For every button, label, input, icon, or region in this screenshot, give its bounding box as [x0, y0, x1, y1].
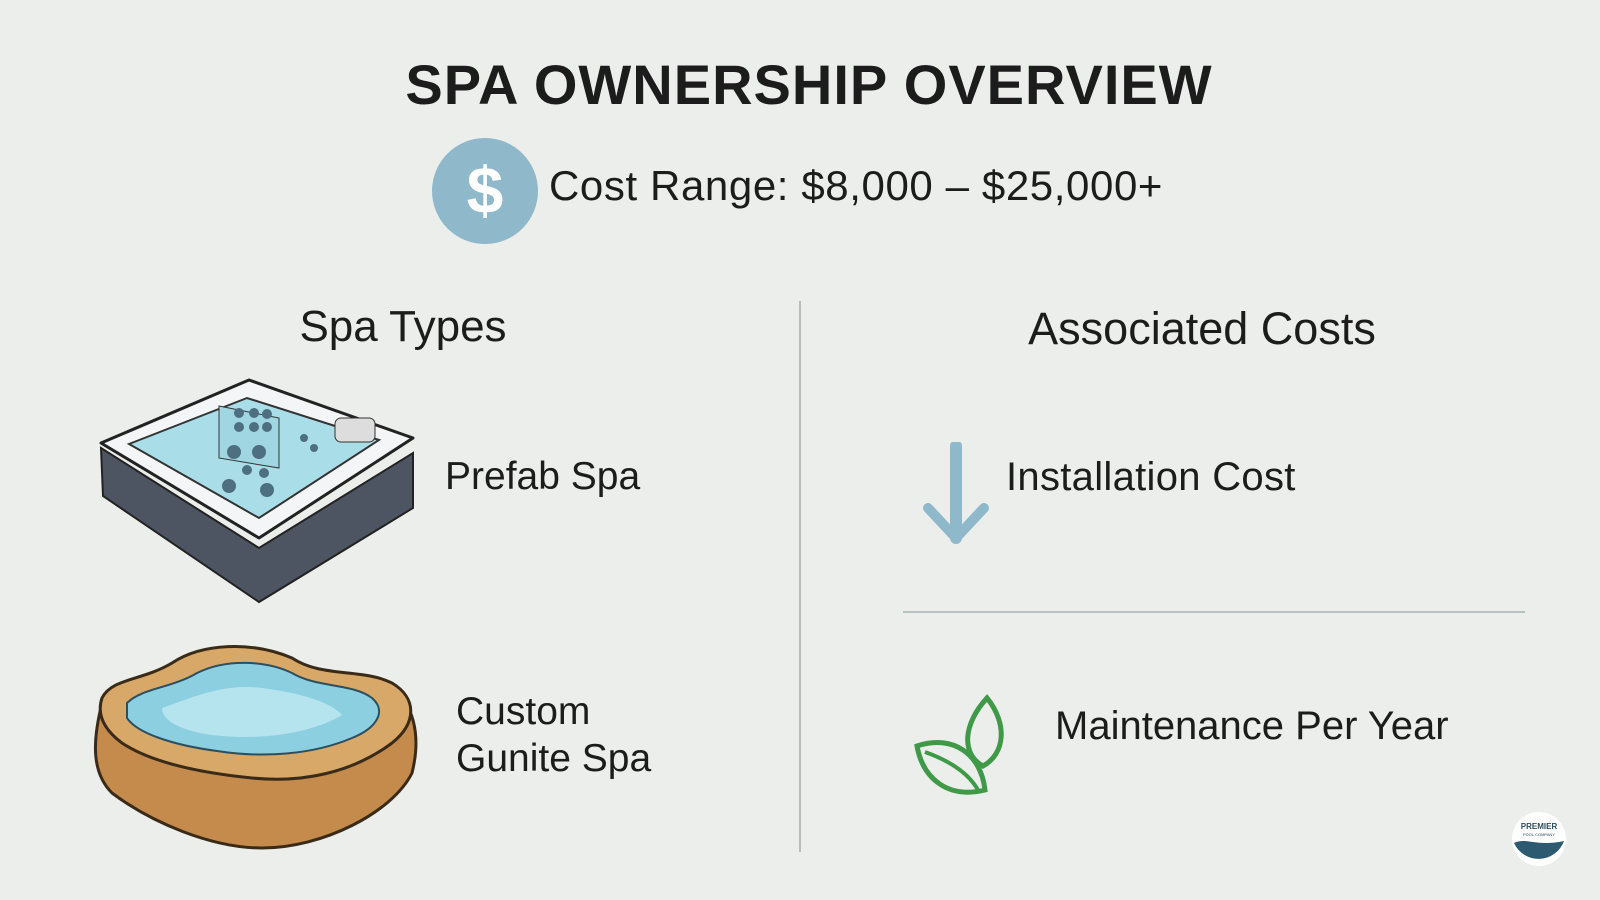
heading: associated costs: Associated Costs [1028, 303, 1376, 354]
logo [1512, 812, 1566, 866]
logo: POOL COMPANY [1523, 832, 1555, 837]
icon: prefab spa [99, 378, 414, 604]
divider vertical [799, 301, 801, 852]
icon: leaves [914, 694, 1004, 795]
icon: gunite spa [94, 645, 418, 850]
icon: dollar coin: $ [467, 153, 503, 227]
icon: dollar coin [432, 138, 538, 244]
logo: PREMIER [1521, 822, 1557, 831]
label: custom gunite spa [456, 690, 652, 780]
label: custom gunite spa: Gunite Spa [456, 737, 651, 780]
icon: down arrow [923, 442, 989, 544]
label: prefab spa: Prefab Spa [445, 455, 640, 498]
label: installation cost: Installation Cost [1006, 455, 1296, 499]
cost range text: Cost Range: $8,000 – $25,000+ [549, 162, 1163, 209]
label: maintenance per year: Maintenance Per Year [1055, 704, 1449, 748]
heading: spa types: Spa Types [299, 302, 507, 351]
divider horizontal [903, 611, 1525, 613]
title: SPA OWNERSHIP OVERVIEW [405, 53, 1213, 116]
label: custom gunite spa: Custom [456, 690, 590, 733]
